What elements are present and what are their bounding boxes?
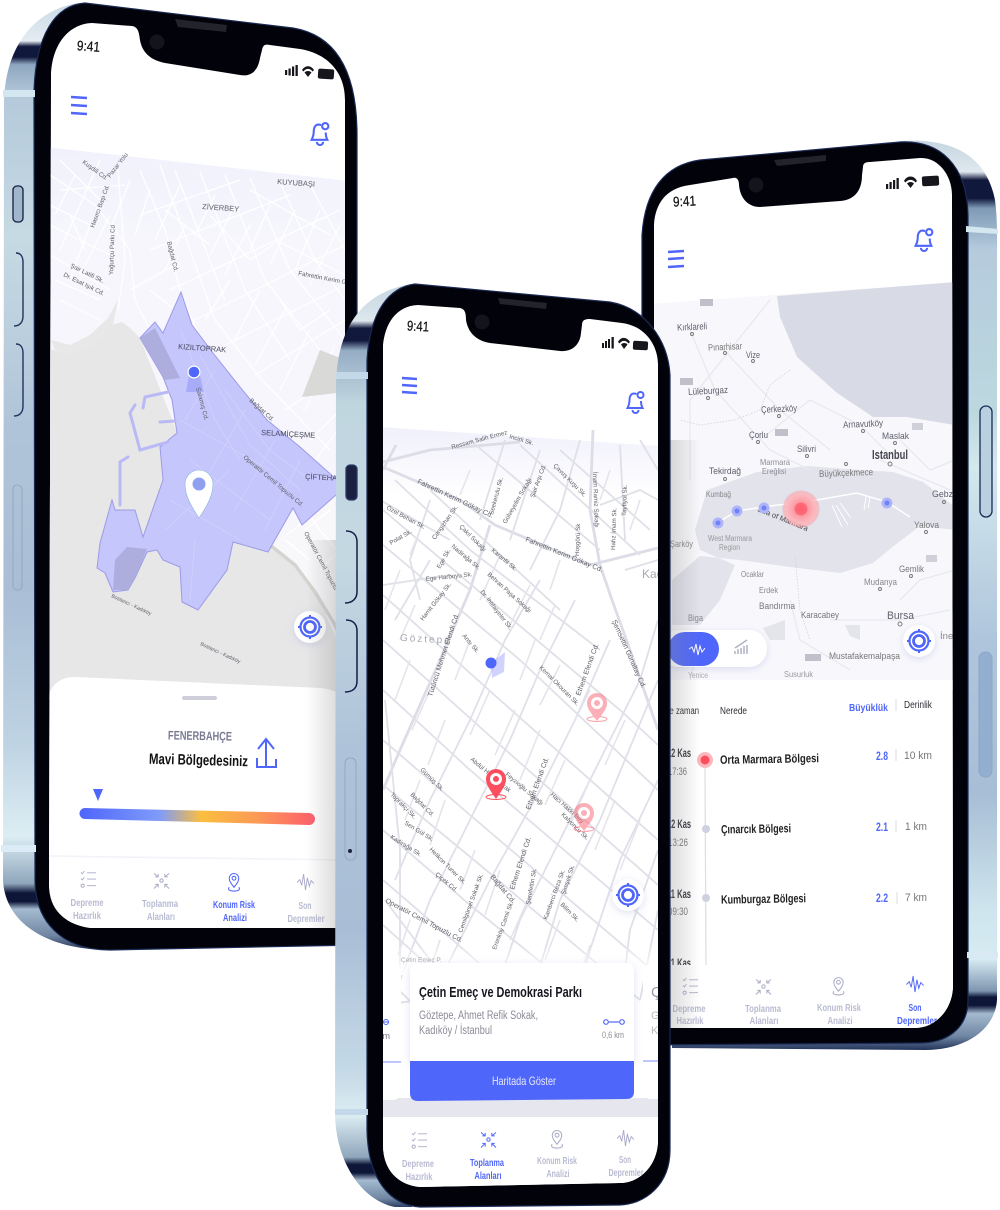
table header <box>664 699 933 717</box>
map: street labels: Erenköy Camii Sk. <box>491 900 515 951</box>
current location dot <box>186 366 204 392</box>
map: street labels: Karanfil Sk. <box>490 547 519 573</box>
map: south land islands <box>735 545 950 600</box>
quake row 2 <box>667 819 927 849</box>
map: street labels: Ethem Efendi Cd. <box>575 643 601 697</box>
header: status time: 9:41 <box>76 37 101 55</box>
screen: right phone <box>645 150 966 1035</box>
card title: Çetin Emeç ve Demokrasi Parkı <box>419 984 582 1001</box>
map labels: Kumbağ <box>706 489 731 499</box>
card: previous (cut off): km <box>378 1031 390 1041</box>
nav: Toplanma Alanları: Alanları <box>750 1015 779 1027</box>
map: street labels: Seekerulu Sk. <box>488 476 505 516</box>
nav: Toplanma Alanları: Toplanma <box>745 1003 781 1015</box>
map: street labels: Şimşek Sk. <box>560 864 577 896</box>
card: Çetin Emeç ve Demokrasi Parkı <box>410 963 634 1101</box>
earthquake marker: main red <box>782 490 820 528</box>
map labels: Pazar Yolu <box>106 151 130 179</box>
locate button <box>903 625 935 657</box>
speaker grille <box>774 155 826 166</box>
location pin <box>185 470 213 518</box>
map labels: Lüleburgaz <box>688 385 729 398</box>
silence switch <box>13 186 23 222</box>
map labels: Bandırma <box>759 601 796 612</box>
nav: Son Depremler: Son <box>908 1002 922 1014</box>
map: street labels: Cemilgürsel Sokak Sk. <box>457 873 485 934</box>
locate button <box>294 611 326 643</box>
card: next (cut off): K <box>651 1025 659 1037</box>
lower side button <box>979 652 992 777</box>
nav bar <box>650 965 955 1035</box>
risk marker <box>93 789 103 801</box>
risk zone dark park <box>113 328 180 590</box>
current location dot <box>486 652 505 678</box>
nav: Depreme Hazırlık: Hazırlık <box>406 1171 433 1183</box>
map labels: Karacabey <box>801 610 839 621</box>
nav: Son Depremler <box>897 976 937 1027</box>
quake row 1: Orta Marmara Bölgesi <box>720 751 819 767</box>
map labels: Bostancı - Kadıköy <box>110 593 153 617</box>
phone frame: left black bezel <box>34 3 357 950</box>
nav: Konum Risk Analizi <box>213 873 255 924</box>
icon: notification bell <box>916 229 932 251</box>
phone: left (risk analysis) <box>1 3 371 950</box>
nav: Toplanma Alanları: Toplanma <box>142 898 178 910</box>
quake row 3: 2.2 <box>876 891 888 905</box>
map: Black Sea <box>777 282 955 425</box>
phone frame: right black bezel <box>642 142 968 1045</box>
map labels: Sea of Marmara <box>756 505 810 533</box>
map: street labels: Gümüş Sk. <box>419 766 445 793</box>
power button <box>980 406 992 517</box>
map pin: active <box>486 769 506 800</box>
map: road shields <box>680 299 937 661</box>
map: inland grey patches <box>763 620 860 640</box>
light antenna band top <box>3 90 35 97</box>
front camera <box>748 178 764 192</box>
map: street labels: Çiçek Cd. <box>434 871 459 894</box>
map: street labels: Kamberci Beza Sk. <box>542 869 567 921</box>
speaker grille <box>498 298 547 309</box>
map labels: Operatör Cemil Topuzlu Cd. <box>242 454 305 509</box>
map labels: Şarköy <box>670 539 693 550</box>
nav: Depreme Hazırlık: Depreme <box>402 1158 434 1170</box>
nav: Depreme Hazırlık <box>672 978 706 1027</box>
shadow cast by middle phone <box>670 440 700 1030</box>
map labels: Hasırcı Başı Cd. <box>89 184 111 229</box>
map labels: Pınarhisar <box>708 341 742 354</box>
map: fault line <box>717 493 910 523</box>
map labels: Erdek <box>759 585 779 595</box>
map: street labels: Ege Harboyu Sk. <box>425 571 473 583</box>
map: street labels: Dr. İhtifaiyeler Sk. <box>478 589 514 632</box>
map: street labels: Hacı Hakkı Bey <box>549 791 586 826</box>
nav bar <box>378 1117 663 1197</box>
map labels: Çerkezköy <box>761 403 798 416</box>
map labels: Kırklareli <box>677 321 707 334</box>
nav: Son Depremler: Depremler <box>897 1015 937 1027</box>
map labels: Marmara <box>760 457 790 467</box>
map: street labels: Bağdat Cd. <box>488 874 516 905</box>
SIM tray outline <box>13 485 22 590</box>
nav: Konum Risk Analizi: Analizi <box>546 1168 570 1180</box>
map labels: Istanbul <box>872 447 908 462</box>
quake row 1: 2.8 <box>876 749 888 763</box>
map labels: Kuşdili Cd. <box>81 159 109 182</box>
nav: Son Depremler <box>608 1130 644 1179</box>
map labels: Dr. Esat Işık Cd. <box>62 272 106 298</box>
map: street labels: Nadirağa Sk. <box>450 543 482 572</box>
quake row 2: 13:26 <box>668 837 688 849</box>
map labels: Yalova <box>914 520 940 531</box>
card button label: Haritada Göster <box>492 1074 556 1088</box>
map: street labels: Incirli Sk. <box>508 433 535 447</box>
quake row 2: 1 km <box>905 821 927 833</box>
quake row 1: 17:36 <box>668 766 687 778</box>
map labels: Operatör Cemil Topuzlu Cd. <box>302 531 344 601</box>
map labels: Yoğurtçu Parkı Cd <box>108 224 117 275</box>
nav: Konum Risk Analizi: Analizi <box>223 912 247 924</box>
icon: distance <box>604 1020 624 1024</box>
phone: middle (assembly areas) <box>335 284 673 1207</box>
map: right land streets <box>285 495 345 570</box>
map: street labels: Hamit Gökay Sk. <box>419 581 453 622</box>
nav: Son Depremler: Son <box>298 900 312 912</box>
map: street labels: Ege Sk. <box>436 547 453 570</box>
map: street labels: Bilim Sk. <box>559 901 581 924</box>
phone frame: right metal edge <box>672 141 997 1050</box>
map labels: Bağdat Cd. <box>165 241 179 273</box>
table header: Büyüklük <box>849 703 888 714</box>
map labels: İnegöl <box>940 631 966 642</box>
quake row 3: Kumburgaz Bölgesi <box>721 891 806 907</box>
map: street labels: Tütüncü Mehmet Efendi Cd. <box>427 613 461 698</box>
map labels: Yenice <box>688 670 708 680</box>
map: street labels: Kalyoncu Sk. <box>560 811 590 842</box>
map labels: Çorlu <box>749 430 768 441</box>
map labels: KUYUBAŞI <box>277 177 315 189</box>
map view toggle <box>660 630 767 667</box>
screen: middle phone <box>370 300 673 1197</box>
map pin: faded top <box>587 693 607 722</box>
map: coast land strip <box>51 300 118 354</box>
nav: Depreme Hazırlık: Hazırlık <box>676 1015 704 1027</box>
map labels: Vize <box>746 350 760 361</box>
volume up button <box>345 531 357 603</box>
map: fade behind cards <box>378 945 663 975</box>
screen: left phone <box>49 23 345 928</box>
map: minor streets <box>380 440 658 1030</box>
nav: Toplanma Alanları <box>745 980 781 1027</box>
map: land <box>45 147 350 700</box>
distance value: 0,6 km <box>602 1030 624 1040</box>
map: region border <box>680 370 810 640</box>
icon: share <box>257 739 276 767</box>
card: next (cut off): G <box>651 1010 660 1022</box>
nav: Son Depremler <box>288 874 324 925</box>
icon: menu <box>402 378 417 393</box>
risk zone polygon <box>97 292 345 610</box>
map labels: Silivri <box>797 444 816 455</box>
nav: Son Depremler: Depremler <box>288 913 324 925</box>
map: street labels: Toprakçı Sk. <box>389 791 418 821</box>
map: street labels: Çakıl Sokağı <box>458 523 488 553</box>
map: street labels: Polat Sk. <box>388 528 414 547</box>
quake row 2: 12 Kas <box>667 819 691 831</box>
map: right land south <box>272 470 345 650</box>
map pin: faded lower <box>574 803 594 832</box>
quake row 2: 2.1 <box>876 820 888 834</box>
quake row 3: 11 Kas <box>667 889 691 901</box>
map: street labels: Fahrettin Kerim Gökay Cd. <box>416 478 494 520</box>
map labels <box>62 151 371 665</box>
map: street labels: Cengizhan Sk. <box>431 504 460 541</box>
nav: Konum Risk Analizi: Konum Risk <box>537 1155 577 1167</box>
map labels: Region <box>719 543 740 552</box>
map: risk zone <box>97 292 345 610</box>
map: bottom band <box>380 1098 660 1120</box>
map labels: Tekirdağ <box>709 466 741 477</box>
nav: Toplanma Alanları <box>142 874 178 923</box>
nav: Son Depremler: Depremler <box>608 1167 644 1179</box>
quake row 1: 12 Kas <box>667 748 691 760</box>
map labels: Susurluk <box>784 669 814 679</box>
map labels: KIZILTOPRAK <box>178 342 226 354</box>
quake row 2: Çınarcık Bölgesi <box>721 821 791 837</box>
white fade under map <box>650 680 955 965</box>
nav: Son Depremler: Son <box>619 1154 631 1166</box>
risk zone piers <box>120 392 175 505</box>
phone frame: middle black bezel <box>367 284 670 1207</box>
map: street labels: Bağdat Cd. <box>409 791 436 819</box>
quake row 3: 09:30 <box>668 906 688 918</box>
map: street labels: Şair Arşı Cd. <box>529 463 548 499</box>
status time: 9:41 <box>673 192 697 210</box>
nav: Depreme Hazırlık <box>402 1132 434 1183</box>
map labels: Ereğlisi <box>762 466 786 476</box>
map: street labels: Abdül Hakk Sokak <box>469 756 513 795</box>
nav: Konum Risk Analizi: Konum Risk <box>817 1002 861 1014</box>
timeline line <box>705 768 706 965</box>
table header: Ne zaman <box>664 706 699 717</box>
phone frame: left metal edge <box>3 3 120 950</box>
volume down button <box>345 620 357 692</box>
silence switch <box>346 465 357 500</box>
phone frame: middle metal edge <box>335 284 412 1207</box>
map: land <box>952 282 953 690</box>
map: main avenues <box>383 430 658 790</box>
map labels: Bağdat Cd. <box>248 397 276 423</box>
map labels: ÇİFTEHAVUZLAR <box>305 472 367 484</box>
front camera <box>150 34 164 50</box>
map: street labels: Özel Behan Sk. <box>385 505 427 531</box>
map: grey land patch <box>302 350 338 397</box>
quake row 4: 11 Kas <box>667 958 691 970</box>
map: street labels: Ethem Efendi Cd. <box>509 836 533 891</box>
map: streets <box>50 160 345 540</box>
map labels: Mustafakemalpaşa <box>829 651 901 662</box>
status icons <box>285 65 334 80</box>
card: next (cut off) <box>643 964 673 1099</box>
icon: menu <box>668 251 684 267</box>
map: street labels: Şerefettin Sk. <box>525 867 538 905</box>
map: Sea of Marmara <box>672 466 955 625</box>
light antenna band bottom <box>1 845 36 852</box>
front camera <box>474 314 490 330</box>
map: street labels: Ethem Efendi Cd. <box>525 757 551 811</box>
map: street labels: Operatör Cemil Topuzlu Cd. <box>384 898 464 944</box>
quake row 3 <box>667 889 927 918</box>
map: street labels: Kad <box>642 567 663 581</box>
map: highways <box>690 300 955 680</box>
sheet handle <box>182 696 217 700</box>
map labels: Büyükçekmece <box>819 467 873 480</box>
map labels: Fahrettin Kerim Gökay Cd. <box>298 270 371 291</box>
nav bar divider <box>48 856 345 860</box>
zone status: Mavi Bölgedesiniz <box>149 751 248 770</box>
map labels: Maslak <box>882 431 909 442</box>
card: previous (cut off) <box>370 963 401 1100</box>
SIM tray <box>345 758 356 860</box>
shadow cast by middle phone <box>314 540 336 928</box>
risk zone streets <box>165 330 310 600</box>
quake row 3: 7 km <box>905 892 927 904</box>
map labels: Mudanya <box>864 577 898 588</box>
nav: Depreme Hazırlık: Depreme <box>672 1003 706 1015</box>
map labels: Gebze <box>932 489 958 500</box>
nav: Toplanma Alanları: Alanları <box>474 1170 502 1182</box>
card address: Kadıköy / İstanbul <box>419 1024 492 1037</box>
icon: menu <box>71 97 87 114</box>
nav: Depreme Hazırlık <box>70 871 104 922</box>
map: street labels: Sen Gül Sk. <box>403 820 435 843</box>
map labels: ZİVERBEY <box>202 202 239 214</box>
quake row 1: 10 km <box>904 750 932 762</box>
map labels: Ocaklar <box>741 569 764 579</box>
icon: notification bell <box>312 123 328 145</box>
bottom sheet <box>48 677 345 860</box>
volume down button <box>14 344 23 416</box>
card button <box>410 1061 634 1101</box>
map: street labels: Kadirağa Sk. <box>389 834 423 859</box>
light antenna band top <box>966 226 998 234</box>
map: street labels: Tayfiyol Sk. <box>621 484 629 516</box>
card address <box>419 1010 538 1037</box>
map labels: SELAMİÇEŞME <box>261 428 315 440</box>
map: city markers <box>690 332 946 626</box>
status time: 9:41 <box>407 317 430 335</box>
risk gradient bar <box>80 808 315 825</box>
map: shore road <box>271 545 336 631</box>
quake row 1 <box>667 748 932 778</box>
table header: Derinlik <box>904 700 933 711</box>
map labels: Arnavutköy <box>843 418 884 431</box>
map: street labels: Ressam Salih Ermez <box>451 429 508 451</box>
map labels: Şair Latifi Sk. <box>69 263 105 285</box>
map labels: West Marmara <box>708 534 752 543</box>
nav: Konum Risk Analizi: Konum Risk <box>213 899 255 911</box>
map: street labels: Gülveyelim Sokağı <box>502 477 534 525</box>
nav: Konum Risk Analizi <box>817 978 861 1027</box>
light antenna band bottom <box>967 952 998 958</box>
map: fault splinters <box>832 497 870 527</box>
map labels <box>670 321 966 680</box>
table header: Nerede <box>720 706 747 717</box>
map: street labels: Kemal Okouran Sk. <box>538 664 581 708</box>
map labels: Gemlik <box>899 564 924 575</box>
nav: Toplanma Alanları <box>470 1132 504 1182</box>
nav: Depreme Hazırlık: Hazırlık <box>73 910 101 922</box>
map: street labels: İmam Ramiz Sokağı <box>591 472 600 528</box>
zone name: FENERBAHÇE <box>168 728 232 744</box>
map background <box>380 427 660 1120</box>
card address: Göztepe, Ahmet Refik Sokak, <box>419 1010 538 1022</box>
map: street labels: Helikon Tuner Sk. <box>428 846 467 886</box>
locate button <box>612 879 644 911</box>
map: street labels: Fahrettin Kerim Gökay Cd. <box>524 536 604 574</box>
map: street labels: Hoşgörü Sk <box>574 523 582 556</box>
nav: Konum Risk Analizi <box>537 1130 577 1180</box>
map: street labels: Behran Paşa Sokağı <box>486 571 533 615</box>
volume up button <box>14 253 23 326</box>
map: cross streets <box>385 470 640 1015</box>
map: street labels: Feyzioğlu Sokağı <box>504 771 545 807</box>
light antenna band top <box>336 372 368 379</box>
map labels: Bursa <box>887 610 915 622</box>
icon: notification bell <box>628 392 644 413</box>
map: street labels <box>384 429 663 964</box>
map: street labels: Göztepe <box>400 633 452 647</box>
map labels: Biga <box>688 613 703 623</box>
map: street labels: Çavuş Kuşu Sk. <box>552 462 588 499</box>
nav: Toplanma Alanları: Alanları <box>147 911 175 923</box>
status icons <box>602 337 648 350</box>
card: next (cut off): Ç <box>651 984 662 1001</box>
map: street labels: Çetin Emeç P. <box>401 957 442 964</box>
nav: Konum Risk Analizi: Analizi <box>828 1015 853 1027</box>
speaker grille <box>175 19 227 32</box>
map labels: Bostancı - Kadıköy <box>199 641 242 665</box>
map: sea <box>45 322 345 700</box>
nav: Depreme Hazırlık: Depreme <box>70 897 104 909</box>
earthquake markers: blue <box>712 498 892 528</box>
map: street labels: Ansı Sk. <box>460 633 481 655</box>
map: street labels: Hafız İmam Sk. <box>610 507 618 550</box>
map labels: Salamış Cd. <box>194 387 210 421</box>
nav: Toplanma Alanları: Toplanma <box>470 1157 504 1169</box>
light antenna band bottom <box>335 1109 368 1115</box>
map: street labels: Şemsettin Günaltay Cd. <box>610 619 647 689</box>
status icons <box>886 176 939 189</box>
phone: right (latest earthquakes) <box>642 141 998 1050</box>
